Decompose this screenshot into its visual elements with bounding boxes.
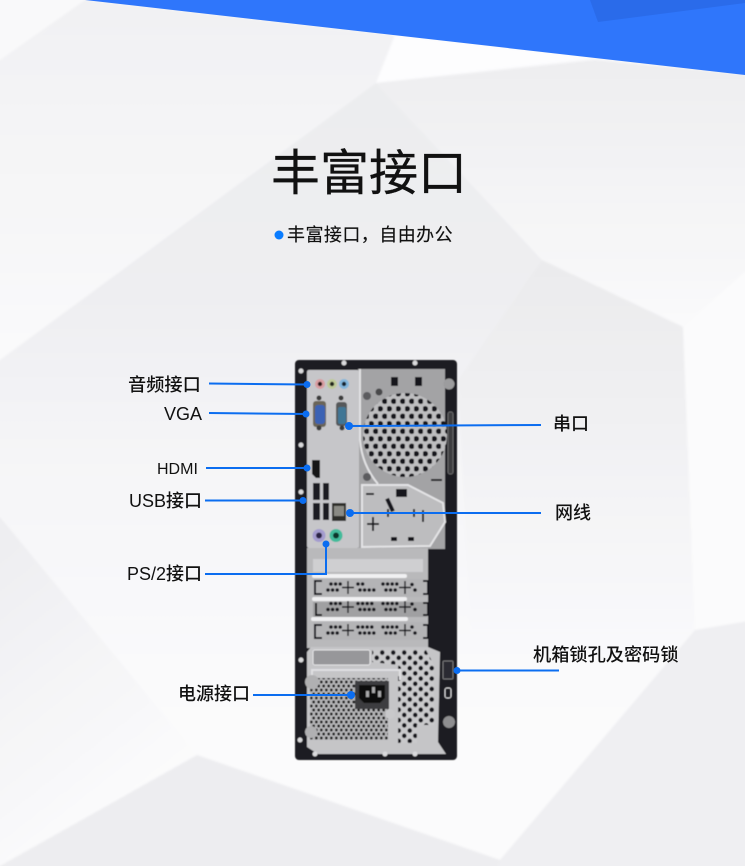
panel rim	[360, 369, 378, 484]
fan grille	[363, 393, 447, 477]
callout: USB接口: USB接口	[129, 491, 202, 511]
USB ports	[313, 483, 329, 520]
power supply plate	[307, 647, 446, 754]
callout: VGA	[164, 404, 310, 424]
VGA port	[313, 396, 326, 430]
mount slots and stamped marks	[363, 377, 442, 541]
lower bracket	[362, 485, 445, 547]
callout: 机箱锁孔及密码锁	[454, 645, 679, 674]
callout: 机箱锁孔及密码锁: 机箱锁孔及密码锁	[533, 645, 679, 665]
chassis body	[295, 360, 457, 760]
I/O shield plate	[307, 370, 359, 548]
chassis screws	[298, 360, 455, 756]
callout: HDMI	[157, 461, 310, 478]
callout: 串口	[345, 414, 589, 434]
top blue banner	[85, 0, 745, 75]
expansion slots	[307, 548, 428, 648]
serial port	[336, 396, 347, 430]
callout: 网线	[346, 503, 591, 523]
rear metal panel	[358, 369, 445, 549]
RJ45 port	[332, 503, 346, 521]
PS/2 ports	[312, 529, 342, 542]
PSU label area	[313, 650, 370, 665]
callout: 电源接口	[178, 684, 355, 704]
right PSU vent	[372, 650, 434, 743]
callout: USB接口	[129, 491, 306, 511]
computer tower rear view	[295, 360, 457, 760]
callout: 音频接口	[128, 375, 310, 395]
audio jacks	[315, 379, 349, 389]
callout: PS/2接口: PS/2接口	[127, 564, 202, 584]
title: 丰富接口	[271, 147, 467, 201]
case lock holes	[443, 661, 453, 698]
callout: HDMI: HDMI	[157, 461, 198, 478]
crosses and brackets	[315, 581, 428, 638]
callout: 音频接口: 音频接口	[128, 375, 201, 395]
subtitle with bullet: 丰富接口，自由办公	[287, 225, 453, 245]
callout: VGA: VGA	[164, 404, 202, 424]
HDMI port	[312, 460, 320, 478]
callout: 网线: 网线	[555, 503, 591, 523]
callout: 电源接口: 电源接口	[178, 684, 250, 704]
callout: 串口: 串口	[553, 414, 589, 434]
callout: PS/2接口	[127, 540, 330, 584]
vent dots	[328, 584, 418, 633]
side latch	[448, 412, 453, 474]
left PSU vent	[310, 670, 400, 740]
AC power socket	[355, 681, 389, 709]
